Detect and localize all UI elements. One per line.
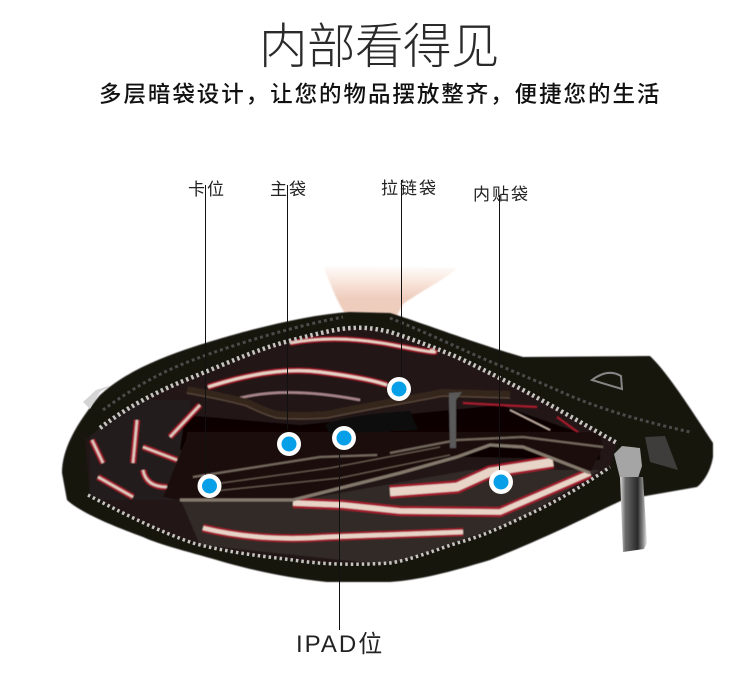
zipper pocket puller xyxy=(449,392,462,448)
leather rim stitching xyxy=(103,317,690,432)
left stripes xyxy=(92,405,200,497)
brown leather wallet card slots xyxy=(163,432,603,500)
leader line: inner patch pocket xyxy=(498,195,500,470)
lower stripes xyxy=(203,528,463,538)
bag outer leather body xyxy=(62,312,713,582)
leader line: zip pocket xyxy=(400,180,402,378)
title: 内部看得见 xyxy=(259,20,499,74)
zipper pull xyxy=(614,446,647,552)
label: card slot: 卡位 xyxy=(188,180,226,199)
side ring xyxy=(83,385,112,409)
marker: inner patch pocket xyxy=(489,470,513,494)
label: iPad slot: IPAD位 xyxy=(296,631,384,658)
label: main pocket: 主袋 xyxy=(270,180,308,199)
leader line: main pocket xyxy=(286,185,288,430)
leader line: card slot xyxy=(204,185,206,482)
marker: zip pocket xyxy=(387,377,411,401)
back clasp xyxy=(592,373,622,389)
handbag photo illustration xyxy=(62,180,713,630)
zipper teeth xyxy=(100,328,617,443)
iPad slot flap xyxy=(325,411,418,434)
bag lining interior xyxy=(85,328,617,564)
subtitle: 多层暗袋设计，让您的物品摆放整齐，便捷您的生活 xyxy=(99,82,661,107)
marker: card slot xyxy=(198,474,222,498)
inner zipper pocket edge xyxy=(187,390,510,416)
marker: main pocket xyxy=(277,432,301,456)
gusset at right end xyxy=(645,436,678,470)
upper stripes xyxy=(290,339,435,352)
leader line: iPad slot xyxy=(338,450,340,630)
label: inner patch pocket: 内贴袋 xyxy=(473,185,530,204)
icon: finger holding bag open xyxy=(323,266,458,323)
marker: iPad slot xyxy=(332,426,356,450)
label: zip pocket: 拉链袋 xyxy=(381,179,438,198)
